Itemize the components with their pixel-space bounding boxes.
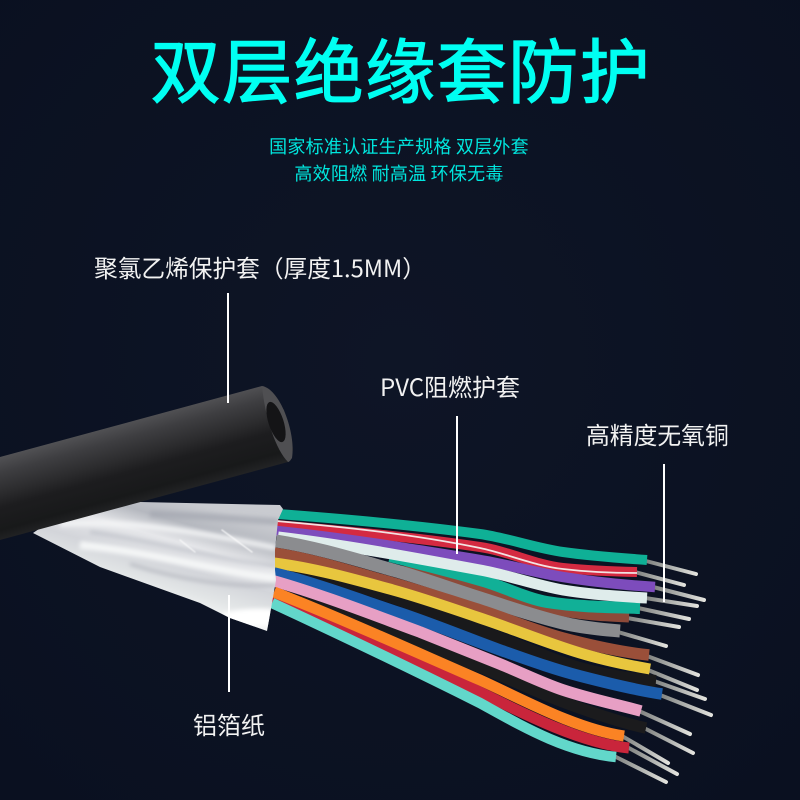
- label: oxygen-free copper: 高精度无氧铜: [586, 416, 729, 451]
- black outer protective cable: [0, 386, 293, 540]
- wire: black: [285, 572, 656, 681]
- wire: red lower: [272, 597, 629, 748]
- cable end ring: [262, 386, 293, 462]
- wire: gray: [276, 541, 620, 631]
- cable hollow: [262, 400, 290, 444]
- wire: aqua: [272, 603, 616, 757]
- wire: teal: [278, 514, 647, 560]
- wire: purple: [276, 531, 655, 587]
- foil wrinkles: [60, 514, 278, 622]
- wire: yellow: [274, 563, 650, 669]
- wire: orange: [274, 592, 624, 736]
- subtitle text block: 高效阻燃 耐高温 环保无毒: [294, 160, 504, 186]
- label: outer jacket: 聚氯乙烯保护套（厚度1.5MM）: [94, 250, 426, 284]
- label: flame-retardant sheath: PVC阻燃护套: [380, 368, 520, 403]
- icon: bare copper conductors: [614, 561, 711, 782]
- title: 双层绝缘套防护: [151, 17, 651, 118]
- aluminium foil sheath: [33, 502, 283, 631]
- wire: brown: [274, 553, 649, 655]
- wire: red with white stripe: [276, 521, 637, 573]
- label: foil: 铝箔纸: [193, 706, 265, 741]
- wire: pink: [274, 581, 641, 711]
- wire: white: [278, 537, 647, 598]
- coloured insulated wires: [272, 514, 662, 757]
- leader line: oxygen-free copper: [663, 464, 665, 602]
- subtitle text block: 国家标准认证生产规格 双层外套: [269, 133, 529, 159]
- wire: black lower: [300, 600, 646, 728]
- wire: blue: [274, 573, 662, 694]
- wire: teal inner: [390, 556, 640, 608]
- wire: brown thin: [400, 570, 629, 618]
- subtitle text block: [269, 133, 529, 186]
- leader line: outer jacket: [227, 293, 229, 403]
- leader line: flame-retardant sheath: [456, 416, 458, 554]
- leader line: foil: [228, 595, 230, 692]
